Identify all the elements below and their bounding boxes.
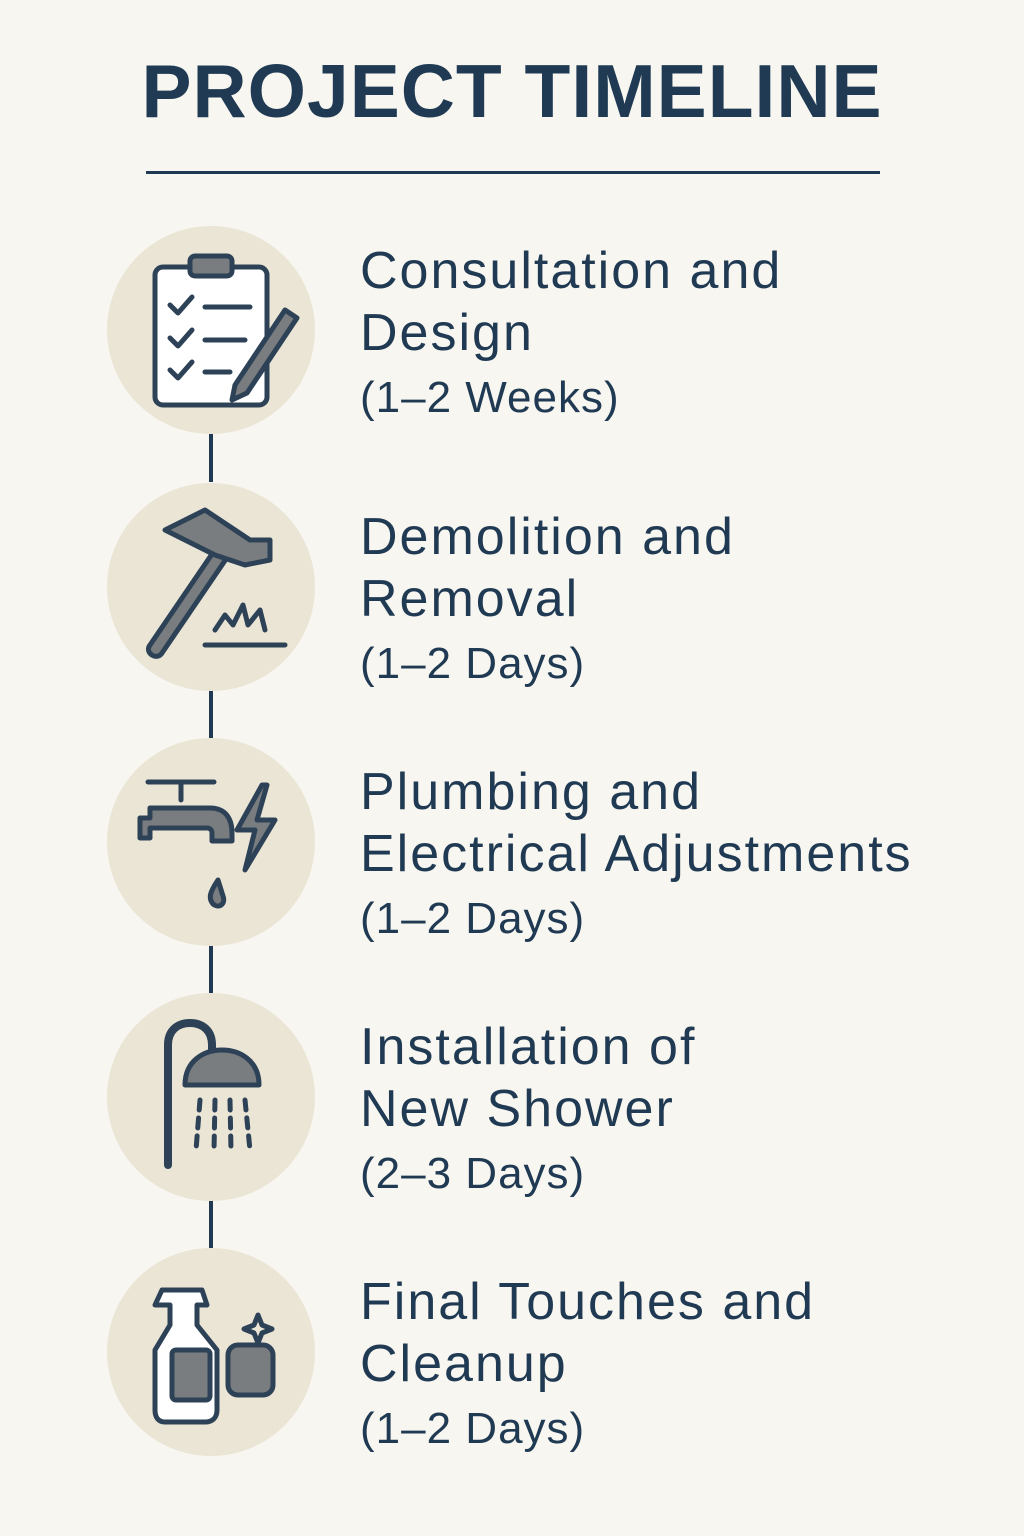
step 2 text: Demolition and: [360, 508, 735, 566]
step 4 text: New Shower: [360, 1080, 675, 1138]
icon: hammer: [148, 510, 285, 656]
step 1 text: [360, 242, 782, 422]
step 2 text: (1–2 Days): [360, 639, 585, 688]
step 1 circle: [107, 226, 315, 434]
step 3 text: Plumbing and: [360, 763, 702, 821]
step 5 text: (1–2 Days): [360, 1404, 585, 1453]
title: PROJECT TIMELINE: [141, 49, 883, 133]
step 4 text: [360, 1018, 696, 1198]
step 2 text: Removal: [360, 570, 579, 628]
step 2 circle: [107, 483, 315, 691]
step 1 text: Consultation and: [360, 242, 782, 300]
step 2 text: [360, 508, 735, 688]
icon: faucet and lightning: [140, 782, 275, 906]
step 1 text: Design: [360, 304, 534, 362]
icon: shower: [168, 1023, 259, 1165]
step 3 text: Electrical Adjustments: [360, 825, 913, 883]
step 4 text: Installation of: [360, 1018, 696, 1076]
step 5 text: Cleanup: [360, 1335, 568, 1393]
step 3 circle: [107, 738, 315, 946]
step 4 circle: [107, 993, 315, 1201]
icon: clipboard: [155, 256, 297, 405]
step 4 text: (2–3 Days): [360, 1149, 585, 1198]
step 5 text: [360, 1273, 815, 1453]
step 3 text: (1–2 Days): [360, 894, 585, 943]
step 5 text: Final Touches and: [360, 1273, 815, 1331]
icon: spray bottle: [155, 1290, 273, 1422]
step 1 text: (1–2 Weeks): [360, 373, 620, 422]
step 5 circle: [107, 1248, 315, 1456]
step 3 text: [360, 763, 913, 943]
